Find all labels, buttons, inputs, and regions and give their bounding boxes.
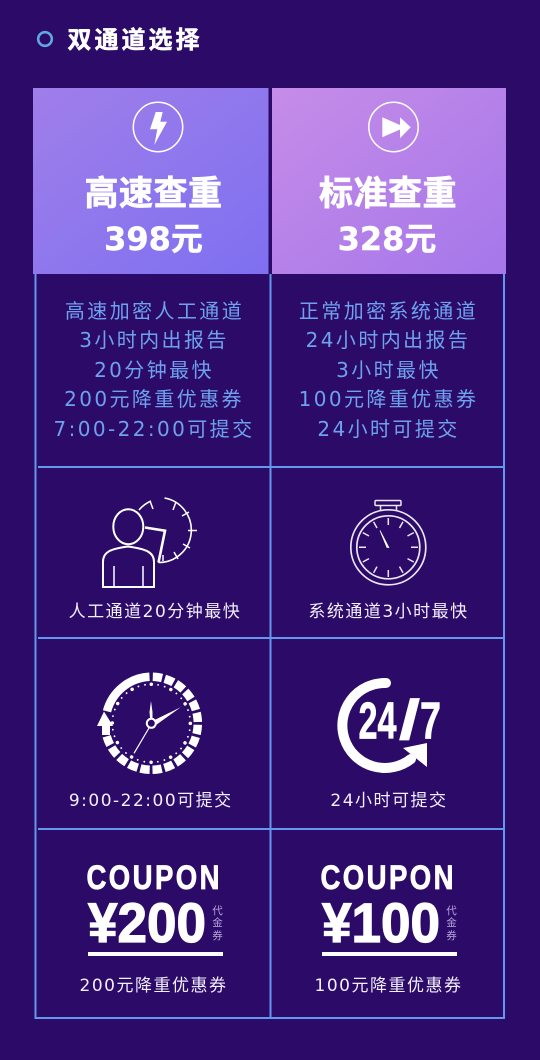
- icon: fast forward: [369, 102, 418, 152]
- feature list: high-speed: 200元降重优惠券: [64, 387, 244, 411]
- caption: 24小时可提交: [330, 791, 448, 811]
- caption: 9:00-22:00可提交: [69, 791, 233, 811]
- icon: stopwatch: [351, 500, 426, 585]
- feature list: standard: [299, 299, 478, 441]
- icon: person and clock: [103, 498, 197, 587]
- plan price: 398元: [104, 220, 203, 258]
- icon: 24/7 arrow: 24: [358, 692, 397, 750]
- comparison table grid: [36, 274, 504, 1018]
- feature list: high-speed: 3小时内出报告: [79, 328, 229, 352]
- caption: 200元降重优惠券: [80, 976, 227, 996]
- icon: 24/7 arrow: /: [399, 688, 421, 751]
- coupon: 200: 代: [212, 905, 223, 917]
- feature list: standard: 100元降重优惠券: [299, 387, 478, 411]
- icon: lightning bolt: [133, 102, 183, 152]
- icon: heading ring: [38, 32, 52, 46]
- caption: 系统通道3小时最快: [308, 602, 469, 622]
- icon: 24/7 arrow: [342, 683, 441, 768]
- caption: 人工通道20分钟最快: [69, 602, 241, 622]
- panel: standard header: [272, 88, 506, 274]
- plan name: 高速查重: [84, 175, 222, 213]
- panel: high-speed header: [33, 88, 268, 274]
- coupon: 200: [86, 858, 223, 956]
- feature list: standard: 24小时可提交: [317, 417, 460, 441]
- feature list: high-speed: 高速加密人工通道: [65, 299, 244, 323]
- coupon: 100: ¥100: [322, 891, 440, 954]
- icon: dial clock with arrow: [97, 677, 198, 770]
- coupon: 100: 券: [446, 929, 457, 942]
- feature list: standard: 24小时内出报告: [306, 328, 470, 352]
- feature list: high-speed: 7:00-22:00可提交: [54, 417, 254, 441]
- plan price: 328元: [338, 220, 436, 258]
- feature list: standard: 正常加密系统通道: [299, 299, 478, 323]
- feature list: high-speed: 20分钟最快: [94, 358, 214, 382]
- coupon: 200: COUPON: [86, 858, 222, 897]
- plan name: 标准查重: [319, 175, 457, 213]
- caption: 100元降重优惠券: [315, 976, 462, 996]
- coupon: 100: COUPON: [320, 858, 456, 897]
- coupon: 200: 金: [212, 916, 223, 929]
- coupon: 100: [320, 858, 457, 956]
- icon: 24/7 arrow: 7: [420, 692, 441, 750]
- feature list: standard: 3小时最快: [336, 358, 441, 382]
- feature list: high-speed: [54, 299, 254, 441]
- coupon: 100: 金: [446, 916, 457, 929]
- coupon: 200: ¥200: [88, 891, 206, 954]
- section heading: [38, 27, 203, 54]
- coupon: 100: 代: [446, 905, 457, 917]
- coupon: 200: 券: [212, 929, 223, 942]
- heading text: 双通道选择: [68, 27, 202, 54]
